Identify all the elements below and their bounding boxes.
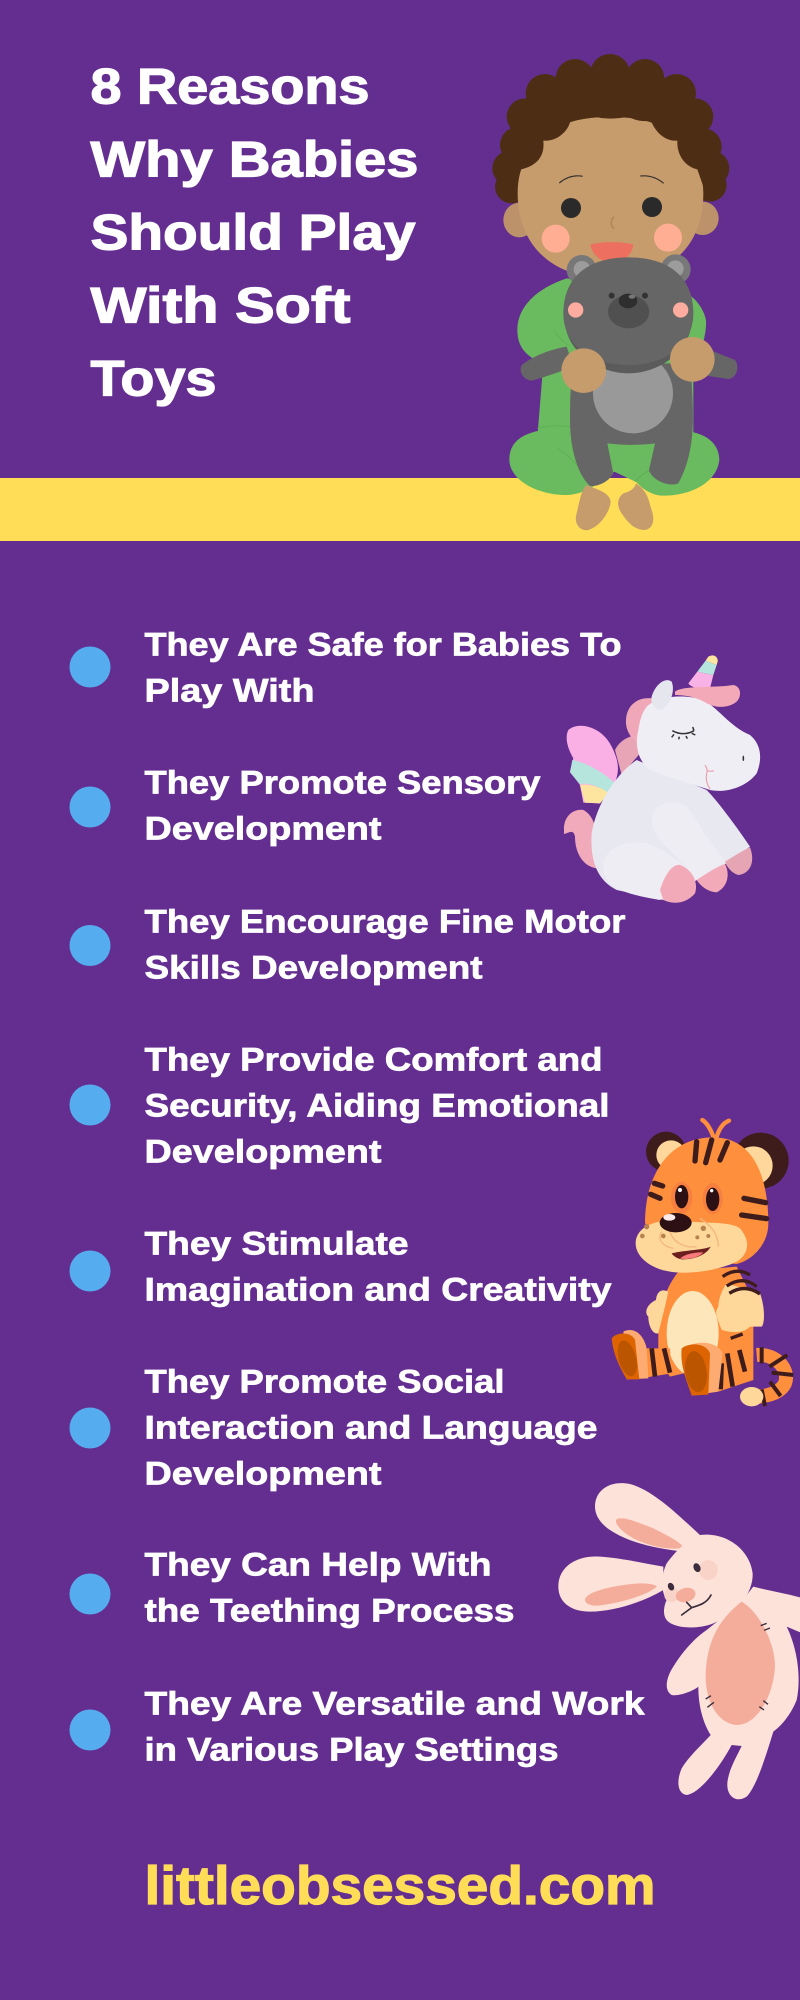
list item 3: Skills Development xyxy=(144,950,483,986)
unicorn forelock xyxy=(675,685,740,707)
title xyxy=(90,58,418,406)
unicorn head xyxy=(637,697,760,791)
list item 4: Development xyxy=(144,1134,382,1170)
tiger tuft xyxy=(702,1120,729,1139)
illustration: bunny plush xyxy=(558,1483,800,1799)
title: With Soft xyxy=(90,278,351,334)
yellow floor band xyxy=(0,478,800,541)
list item 6: Interaction and Language xyxy=(144,1410,598,1446)
clothing creases xyxy=(538,332,651,482)
list item 7 xyxy=(70,1546,514,1628)
title: Why Babies xyxy=(90,132,418,188)
list item 8: They Are Versatile and Work xyxy=(144,1686,645,1722)
list item 5 xyxy=(70,1226,612,1308)
list item 2: Development xyxy=(144,810,382,846)
list item 8 xyxy=(70,1686,645,1768)
bunny lower ear xyxy=(558,1557,663,1612)
tiger left paw xyxy=(646,1290,668,1334)
baby hands xyxy=(561,337,715,393)
tiger legs xyxy=(640,1348,753,1392)
baby legs xyxy=(509,427,719,496)
list item 4: Security, Aiding Emotional xyxy=(144,1088,610,1124)
tiger body xyxy=(658,1267,753,1377)
tiger eyes xyxy=(671,1182,723,1214)
baby facial features xyxy=(542,176,682,263)
list item 4 xyxy=(70,1042,610,1170)
list item 2 xyxy=(70,764,541,846)
baby feet xyxy=(576,483,653,530)
list item 6: Development xyxy=(144,1456,382,1492)
list item 3: They Encourage Fine Motor xyxy=(144,904,626,940)
tiger right foot xyxy=(681,1343,723,1396)
illustration: baby holding teddy bear xyxy=(492,54,737,530)
tiger right arm xyxy=(716,1271,764,1338)
title: Should Play xyxy=(90,204,416,260)
list item 3 xyxy=(70,904,626,986)
unicorn limbs xyxy=(603,802,725,900)
list item 1: They Are Safe for Babies To xyxy=(144,626,622,662)
tiger ears xyxy=(646,1132,789,1189)
unicorn body xyxy=(591,760,750,900)
list item 1 xyxy=(70,626,622,708)
baby ears xyxy=(503,202,719,237)
tiger tail xyxy=(740,1347,793,1406)
bunny head xyxy=(662,1535,753,1627)
tiger belly xyxy=(667,1291,719,1376)
footer website: littleobsessed.com xyxy=(144,1856,656,1916)
unicorn horn xyxy=(688,655,718,689)
list item 5: They Stimulate xyxy=(144,1226,408,1262)
unicorn wings xyxy=(567,726,640,803)
unicorn mane xyxy=(626,698,653,743)
list item 7: They Can Help With xyxy=(144,1546,492,1582)
list item 2: They Promote Sensory xyxy=(144,764,541,800)
unicorn face xyxy=(672,727,744,789)
baby hair front xyxy=(507,70,713,187)
list item 6: They Promote Social xyxy=(144,1364,504,1400)
illustration: tiger plush xyxy=(612,1120,793,1406)
unicorn hooves xyxy=(660,847,752,903)
title: Toys xyxy=(90,350,216,406)
bunny upper ear xyxy=(595,1483,700,1552)
list item 1: Play With xyxy=(144,672,314,708)
list item 5: Imagination and Creativity xyxy=(144,1272,612,1308)
bunny stitches xyxy=(706,1623,770,1710)
unicorn tail xyxy=(564,810,597,868)
baby hair back xyxy=(492,54,729,203)
tiger nose and mouth xyxy=(640,1213,718,1259)
title: 8 Reasons xyxy=(90,58,370,114)
tiger head xyxy=(645,1137,768,1264)
bunny face xyxy=(664,1560,718,1615)
teddy bear xyxy=(521,254,737,486)
list item 7: the Teething Process xyxy=(144,1592,514,1628)
tiger left foot xyxy=(612,1330,648,1379)
bunny belly xyxy=(706,1602,775,1725)
baby face xyxy=(518,117,703,278)
baby body xyxy=(517,278,706,433)
tiger muzzle xyxy=(636,1220,747,1273)
illustration: unicorn plush xyxy=(564,655,760,903)
list item 8: in Various Play Settings xyxy=(144,1732,558,1768)
list item 4: They Provide Comfort and xyxy=(144,1042,602,1078)
bunny body xyxy=(667,1587,800,1799)
list item 6 xyxy=(70,1364,598,1492)
unicorn ear xyxy=(651,680,673,710)
tiger head stripes xyxy=(651,1140,767,1219)
